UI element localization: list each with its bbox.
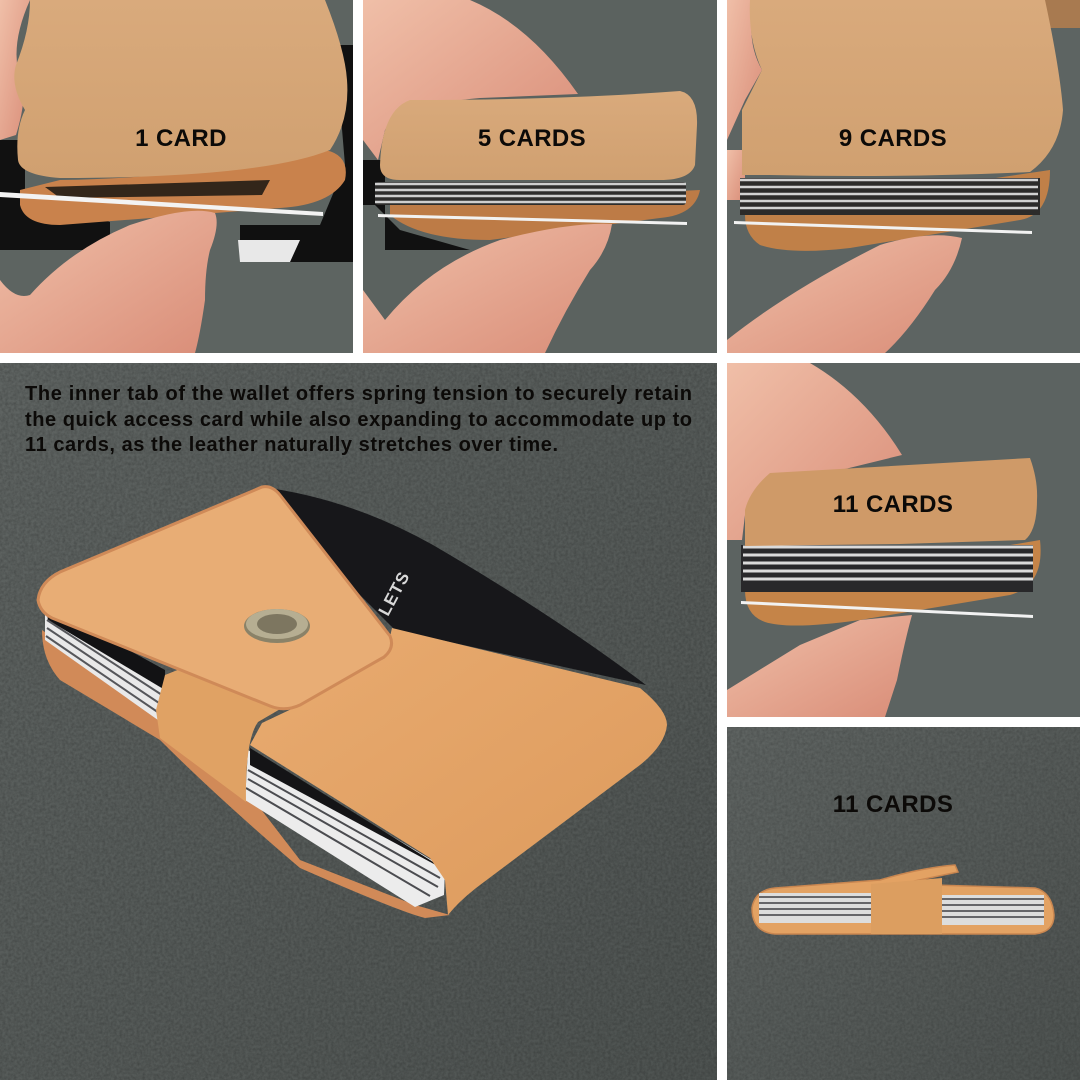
card brand fragment: LETS — [375, 568, 414, 619]
panel: 1 card — [0, 0, 353, 353]
icon: wallet — [38, 487, 667, 918]
caption — [25, 383, 692, 456]
card stack right — [245, 750, 445, 907]
icon: wallet side — [752, 865, 1054, 934]
panel: 9 cards — [727, 0, 1080, 353]
wallet lower back — [42, 630, 450, 918]
panel: 11 cards in hand — [727, 363, 1080, 717]
label: 11 cards: 11 CARDS — [833, 791, 953, 818]
panel: main wallet photo — [0, 363, 717, 1080]
panel: 5 cards — [363, 0, 717, 353]
label: 1 card: 1 CARD — [135, 125, 227, 152]
card stack left — [45, 615, 162, 720]
label: 11 cards: 11 CARDS — [833, 491, 953, 518]
label: 5 cards: 5 CARDS — [478, 125, 586, 152]
wallet body — [250, 628, 667, 915]
panel: 11 cards side view — [727, 727, 1080, 1080]
label: 9 cards: 9 CARDS — [839, 125, 947, 152]
icon: black card — [262, 487, 646, 685]
snap button — [244, 609, 310, 643]
caption: The inner tab of the wallet offers spring tension to securely retain — [25, 383, 692, 405]
strap — [156, 665, 282, 802]
flap — [38, 487, 392, 709]
caption: 11 cards, as the leather naturally stretches over time. — [25, 434, 558, 456]
caption: the quick access card while also expanding to accommodate up to — [25, 409, 692, 431]
